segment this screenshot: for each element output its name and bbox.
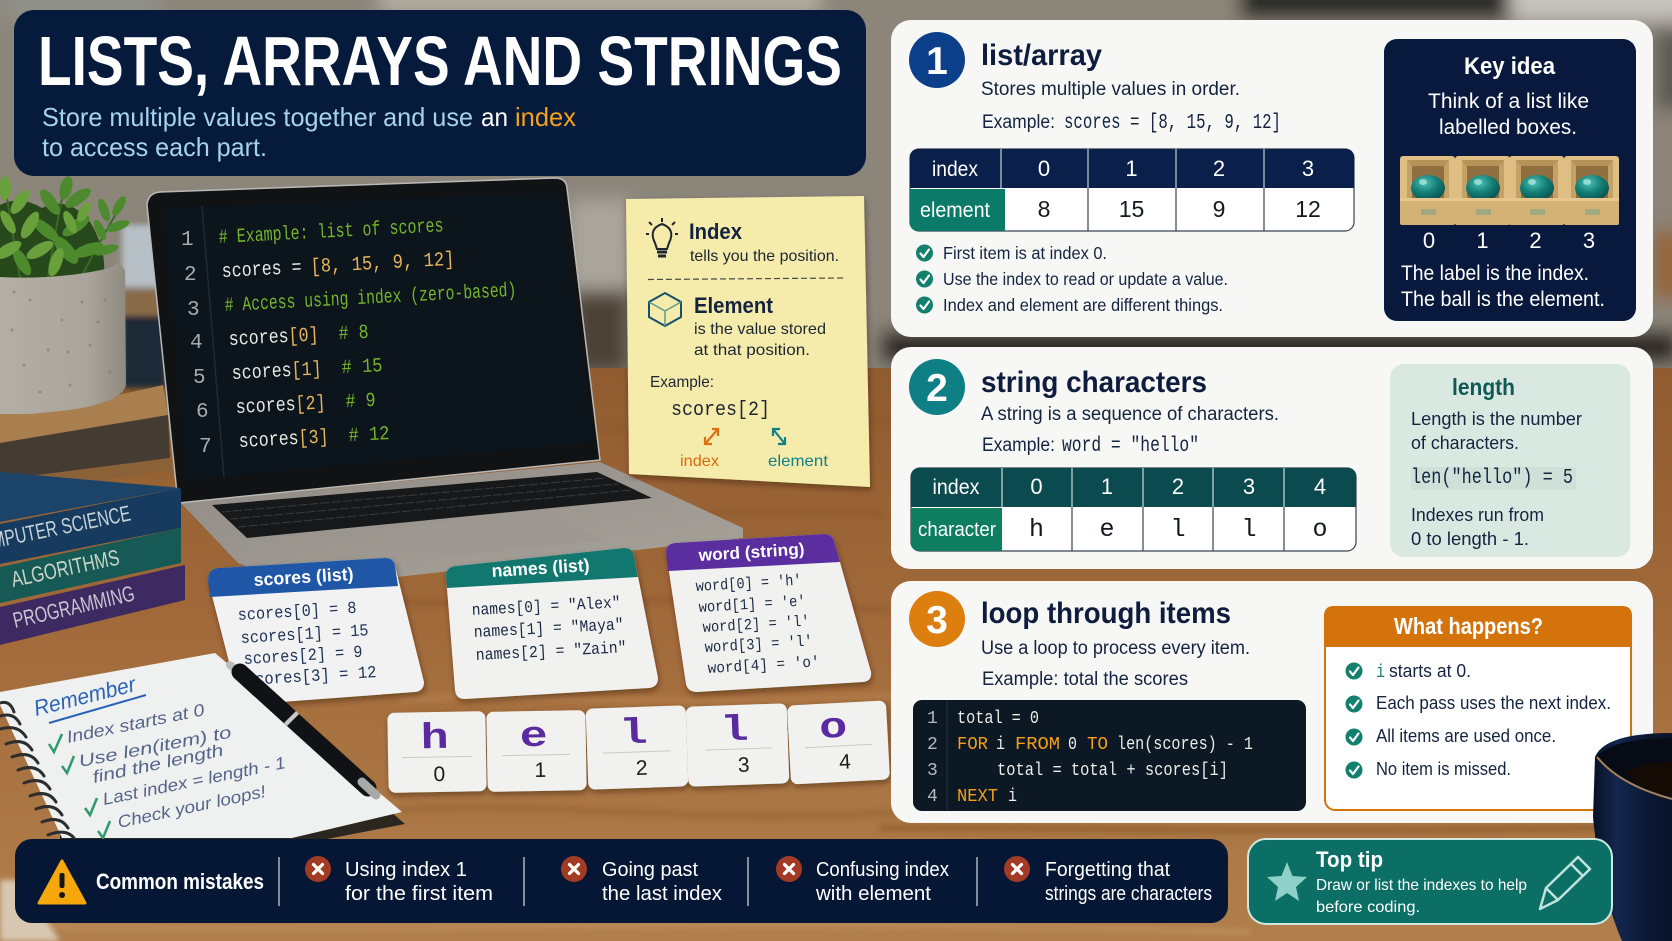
sticky note <box>626 196 870 487</box>
subtitle: index <box>515 102 576 132</box>
mistake 3 <box>776 856 949 905</box>
coffee mug <box>1593 733 1672 941</box>
labelled boxes illustration: 3 <box>1583 228 1595 253</box>
leaves <box>0 175 131 282</box>
length panel: of characters. <box>1411 432 1519 453</box>
element definition: at that position. <box>694 342 810 359</box>
icon: warning <box>39 861 85 903</box>
card lines: scores[2] = 9 <box>243 644 363 670</box>
tile h: h <box>420 718 449 759</box>
heading: list/array <box>981 39 1102 72</box>
pseudocode block: 4 <box>927 787 938 807</box>
subtitle <box>42 102 576 162</box>
length panel <box>1390 364 1630 557</box>
description <box>981 638 1250 690</box>
tile l: 2 <box>635 757 648 780</box>
notebook <box>0 653 405 845</box>
code on laptop screen: [0] <box>288 324 319 349</box>
what happens panel: All items are used once. <box>1376 726 1556 746</box>
pseudocode block <box>913 700 1306 811</box>
tile e <box>486 710 587 792</box>
number badge 2: 2 <box>926 367 948 410</box>
subtitle: Store multiple values together and use <box>42 102 473 132</box>
mistake 1: Using index 1 <box>345 859 467 881</box>
code on laptop screen: 5 <box>193 367 206 390</box>
description: Use a loop to process every item. <box>981 638 1250 659</box>
card lines <box>471 593 627 665</box>
length panel: length <box>1452 374 1515 400</box>
card lines <box>695 572 820 678</box>
table: list indexes: 8 <box>1038 196 1050 222</box>
what happens panel: No item is missed. <box>1376 759 1511 779</box>
pseudocode block: NEXT <box>957 786 998 807</box>
pseudocode block: total = total + scores[i] <box>997 760 1228 781</box>
blurred room background <box>0 0 1672 390</box>
pen <box>230 665 376 795</box>
card: scores list: scores (list) <box>253 564 354 590</box>
checklist <box>49 700 287 838</box>
description: Example: <box>982 112 1055 133</box>
length panel: Indexes run from <box>1411 504 1544 525</box>
card lines: names[1] = "Maya" <box>473 615 624 642</box>
code on laptop screen: # 12 <box>348 423 390 448</box>
length panel: 0 to length - 1. <box>1411 528 1529 549</box>
description: word = "hello" <box>1062 435 1199 458</box>
wooden table <box>0 225 1672 941</box>
code on laptop screen: # 9 <box>345 390 376 414</box>
number badge 2 <box>909 359 965 415</box>
heading: string characters <box>981 366 1207 399</box>
potted plant <box>0 175 131 414</box>
labels <box>680 453 829 470</box>
number badge 3: 3 <box>926 599 948 642</box>
mistake 3: Confusing index <box>816 859 949 881</box>
code on laptop screen: [8, 15, 9, 12] <box>310 249 455 279</box>
description <box>981 404 1279 458</box>
icon: cube <box>649 293 681 326</box>
tile h <box>387 711 487 793</box>
code on laptop screen: scores <box>231 360 292 386</box>
common mistakes bar <box>15 839 1228 923</box>
tip text: Top tip <box>1316 847 1383 872</box>
table: string indexes <box>911 468 1356 551</box>
length panel: Length is the number <box>1411 408 1582 429</box>
table: list indexes: index <box>932 158 978 181</box>
what happens panel: i <box>1376 663 1385 683</box>
keyboard <box>212 472 652 538</box>
laptop <box>147 178 743 588</box>
pseudocode block: i <box>1008 786 1017 807</box>
table: string indexes: index <box>932 476 980 499</box>
element definition: Element <box>694 293 774 318</box>
table: string indexes: 3 <box>1243 474 1255 499</box>
mistake 1 <box>305 856 493 905</box>
laptop base <box>181 462 743 588</box>
pseudocode block: FROM <box>1015 734 1060 755</box>
label: Common mistakes <box>96 869 264 894</box>
element definition: is the value stored <box>694 321 826 338</box>
labels: index <box>680 453 719 470</box>
tile l <box>586 705 688 790</box>
card: word string: word (string) <box>697 540 805 565</box>
pseudocode block: i <box>996 734 1005 755</box>
card header <box>208 558 398 597</box>
checklist: Check your loops! <box>116 782 268 832</box>
code on laptop screen: 7 <box>199 436 212 459</box>
checklist: Use the index to read or update a value. <box>943 269 1228 289</box>
green book <box>0 528 181 603</box>
card header <box>666 534 840 571</box>
tile o <box>787 700 890 785</box>
table: string indexes: character <box>918 519 996 541</box>
code on laptop screen: scores <box>235 394 296 420</box>
code on laptop screen: 1 <box>181 229 194 252</box>
key idea panel <box>1384 39 1636 321</box>
code on laptop screen: # 8 <box>338 322 369 346</box>
key idea panel: labelled boxes. <box>1439 116 1577 139</box>
card lines: names[2] = "Zain" <box>475 638 627 665</box>
card lines: word[3] = 'l' <box>704 632 813 657</box>
code on laptop screen: 4 <box>190 332 203 355</box>
description <box>981 79 1281 135</box>
card lines: word[0] = 'h' <box>695 572 802 596</box>
mistake 2 <box>561 856 722 905</box>
card lines: scores[3] = 12 <box>245 664 377 691</box>
pseudocode block: total = 0 <box>957 708 1039 729</box>
mistake 2: the last index <box>602 883 722 905</box>
table: string indexes: h <box>1029 515 1044 544</box>
arrow: index <box>705 429 718 444</box>
screen <box>163 192 594 480</box>
mistake 2: Going past <box>602 859 698 881</box>
description: A string is a sequence of characters. <box>981 404 1279 425</box>
trackpad <box>383 512 603 559</box>
title: LISTS, ARRAYS AND STRINGS <box>38 22 842 100</box>
table: list indexes: element <box>920 199 990 222</box>
tile e: 1 <box>534 759 546 782</box>
heading: remember: Remember <box>31 671 140 721</box>
number badge 1 <box>909 32 965 88</box>
code on laptop screen <box>181 215 517 459</box>
table: string indexes: e <box>1099 515 1115 544</box>
pot <box>0 262 126 414</box>
tile l <box>686 703 789 787</box>
what happens panel: What happens? <box>1394 613 1543 639</box>
tip text: before coding. <box>1316 899 1420 916</box>
tile l: l <box>720 710 749 752</box>
tile l: l <box>619 713 648 755</box>
screen bezel <box>147 178 600 503</box>
checklist: find the length <box>91 741 225 787</box>
checklist: Index and element are different things. <box>943 295 1223 315</box>
heading: loop through items <box>981 597 1231 630</box>
blurred background behind the plant <box>0 225 166 941</box>
description: scores = [8, 15, 9, 12] <box>1064 112 1281 135</box>
card: word string <box>666 534 871 692</box>
code on laptop screen: 6 <box>196 401 209 424</box>
example <box>650 374 770 422</box>
description: Example: total the scores <box>982 669 1188 690</box>
pseudocode block: 2 <box>927 735 938 755</box>
labels: element <box>768 453 829 470</box>
top tip panel <box>1248 839 1612 924</box>
mistake 4 <box>1004 856 1212 905</box>
key idea panel: The ball is the element. <box>1401 288 1605 311</box>
letter tiles: hello <box>387 700 890 793</box>
tile l: 3 <box>737 754 750 777</box>
labelled boxes illustration <box>1400 156 1619 253</box>
table: list indexes: 0 <box>1038 156 1050 181</box>
card: names list: names (list) <box>491 555 590 581</box>
table: string indexes: 1 <box>1101 474 1113 499</box>
example: scores[2] <box>671 399 770 422</box>
stacked books <box>0 472 185 645</box>
code on laptop screen: [2] <box>295 392 326 417</box>
card lines: names[0] = "Alex" <box>471 593 621 620</box>
index definition <box>689 219 839 265</box>
element definition <box>694 293 826 359</box>
number badge 3 <box>909 591 965 647</box>
index definition: Index <box>689 219 743 244</box>
code on laptop screen: scores = <box>221 257 302 284</box>
tip text <box>1316 847 1527 916</box>
pseudocode block: 0 <box>1068 734 1077 755</box>
code on laptop screen: # Access using index (zero-based) <box>224 280 517 318</box>
mistake 4: strings are characters <box>1045 883 1212 905</box>
labelled boxes illustration: 1 <box>1476 228 1489 253</box>
card: scores list <box>208 558 424 705</box>
table: list indexes: 15 <box>1119 196 1144 222</box>
purple book: PROGRAMMING <box>11 581 137 633</box>
icon: pencil <box>1540 857 1590 909</box>
green book: ALGORITHMS <box>9 545 122 592</box>
code on laptop screen: scores <box>228 326 289 352</box>
card lines: word[2] = 'l' <box>702 612 810 637</box>
table: list indexes: 2 <box>1213 156 1225 181</box>
what happens panel: starts at 0. <box>1389 661 1471 681</box>
code on laptop screen: [1] <box>291 358 322 383</box>
key idea panel: Key idea <box>1464 53 1556 80</box>
table: list indexes: 3 <box>1302 156 1314 181</box>
key idea panel: The label is the index. <box>1401 262 1589 285</box>
example: Example: <box>650 374 714 391</box>
code on laptop screen: # 15 <box>341 355 383 380</box>
panel 1: list/array <box>891 20 1653 337</box>
description: Example: <box>982 435 1055 456</box>
card lines: scores[1] = 15 <box>240 622 369 649</box>
tip text: Draw or list the indexes to help <box>1316 877 1527 894</box>
subtitle: to access each part. <box>42 132 267 162</box>
pseudocode block: 1 <box>927 709 938 729</box>
labelled boxes illustration: 0 <box>1423 228 1435 253</box>
mistake 1: for the first item <box>345 883 493 905</box>
title banner <box>14 10 866 176</box>
card lines <box>237 600 377 691</box>
checklist <box>916 243 1228 315</box>
card lines: scores[0] = 8 <box>237 600 357 626</box>
code on laptop screen: scores <box>238 428 299 454</box>
card: names list <box>446 548 658 699</box>
table: string indexes: o <box>1312 515 1328 544</box>
checklist: Last index = length - 1 <box>101 753 287 809</box>
length panel: len("hello") = 5 <box>1411 467 1573 490</box>
labelled boxes illustration: 2 <box>1529 228 1542 253</box>
mistake 4: Forgetting that <box>1045 859 1170 881</box>
index definition: tells you the position. <box>690 248 839 265</box>
what happens panel <box>1324 606 1632 810</box>
arrow: element <box>773 429 785 444</box>
checklist: Use len(item) to <box>77 723 233 771</box>
code on laptop screen: # Example: list of scores <box>218 215 444 250</box>
tile e: e <box>519 716 548 757</box>
table: string indexes: 0 <box>1030 474 1043 499</box>
card header <box>446 548 638 588</box>
pseudocode block: 3 <box>927 761 938 781</box>
code on laptop screen: 2 <box>184 264 197 287</box>
table: list indexes <box>910 149 1354 231</box>
what happens panel: Each pass uses the next index. <box>1376 693 1611 713</box>
table: list indexes: 1 <box>1125 156 1138 181</box>
mistake 3: with element <box>815 883 931 905</box>
table: string indexes: l <box>1170 515 1186 544</box>
checklist: First item is at index 0. <box>943 243 1107 263</box>
pseudocode block: len(scores) - 1 <box>1117 734 1253 755</box>
table: list indexes: 9 <box>1213 196 1225 222</box>
number badge 1: 1 <box>926 40 948 83</box>
tile h: 0 <box>433 763 445 786</box>
icon: star <box>1267 862 1307 901</box>
card lines: word[1] = 'e' <box>698 592 806 617</box>
key idea panel: Think of a list like <box>1428 90 1589 113</box>
code on laptop screen: 3 <box>187 299 200 322</box>
table: string indexes: 4 <box>1314 474 1326 499</box>
spiral binding <box>0 702 74 838</box>
pseudocode block: FOR <box>957 734 988 755</box>
table: string indexes: l <box>1241 515 1257 544</box>
book under plant <box>0 385 172 490</box>
checklist: Index starts at 0 <box>65 700 207 747</box>
panel 2: string characters <box>891 347 1653 569</box>
pseudocode block: TO <box>1087 734 1108 755</box>
tile o: o <box>818 707 848 749</box>
page <box>0 653 402 838</box>
code on laptop screen: [3] <box>298 426 329 451</box>
panel 3: loop through items <box>891 581 1653 823</box>
card lines: word[4] = 'o' <box>707 653 820 678</box>
subtitle: an <box>481 102 508 132</box>
table: list indexes: 12 <box>1295 196 1321 222</box>
tile o: 4 <box>839 750 852 774</box>
icon: lightbulb <box>646 218 678 256</box>
description: Stores multiple values in order. <box>981 79 1240 100</box>
table: string indexes: 2 <box>1172 474 1184 499</box>
